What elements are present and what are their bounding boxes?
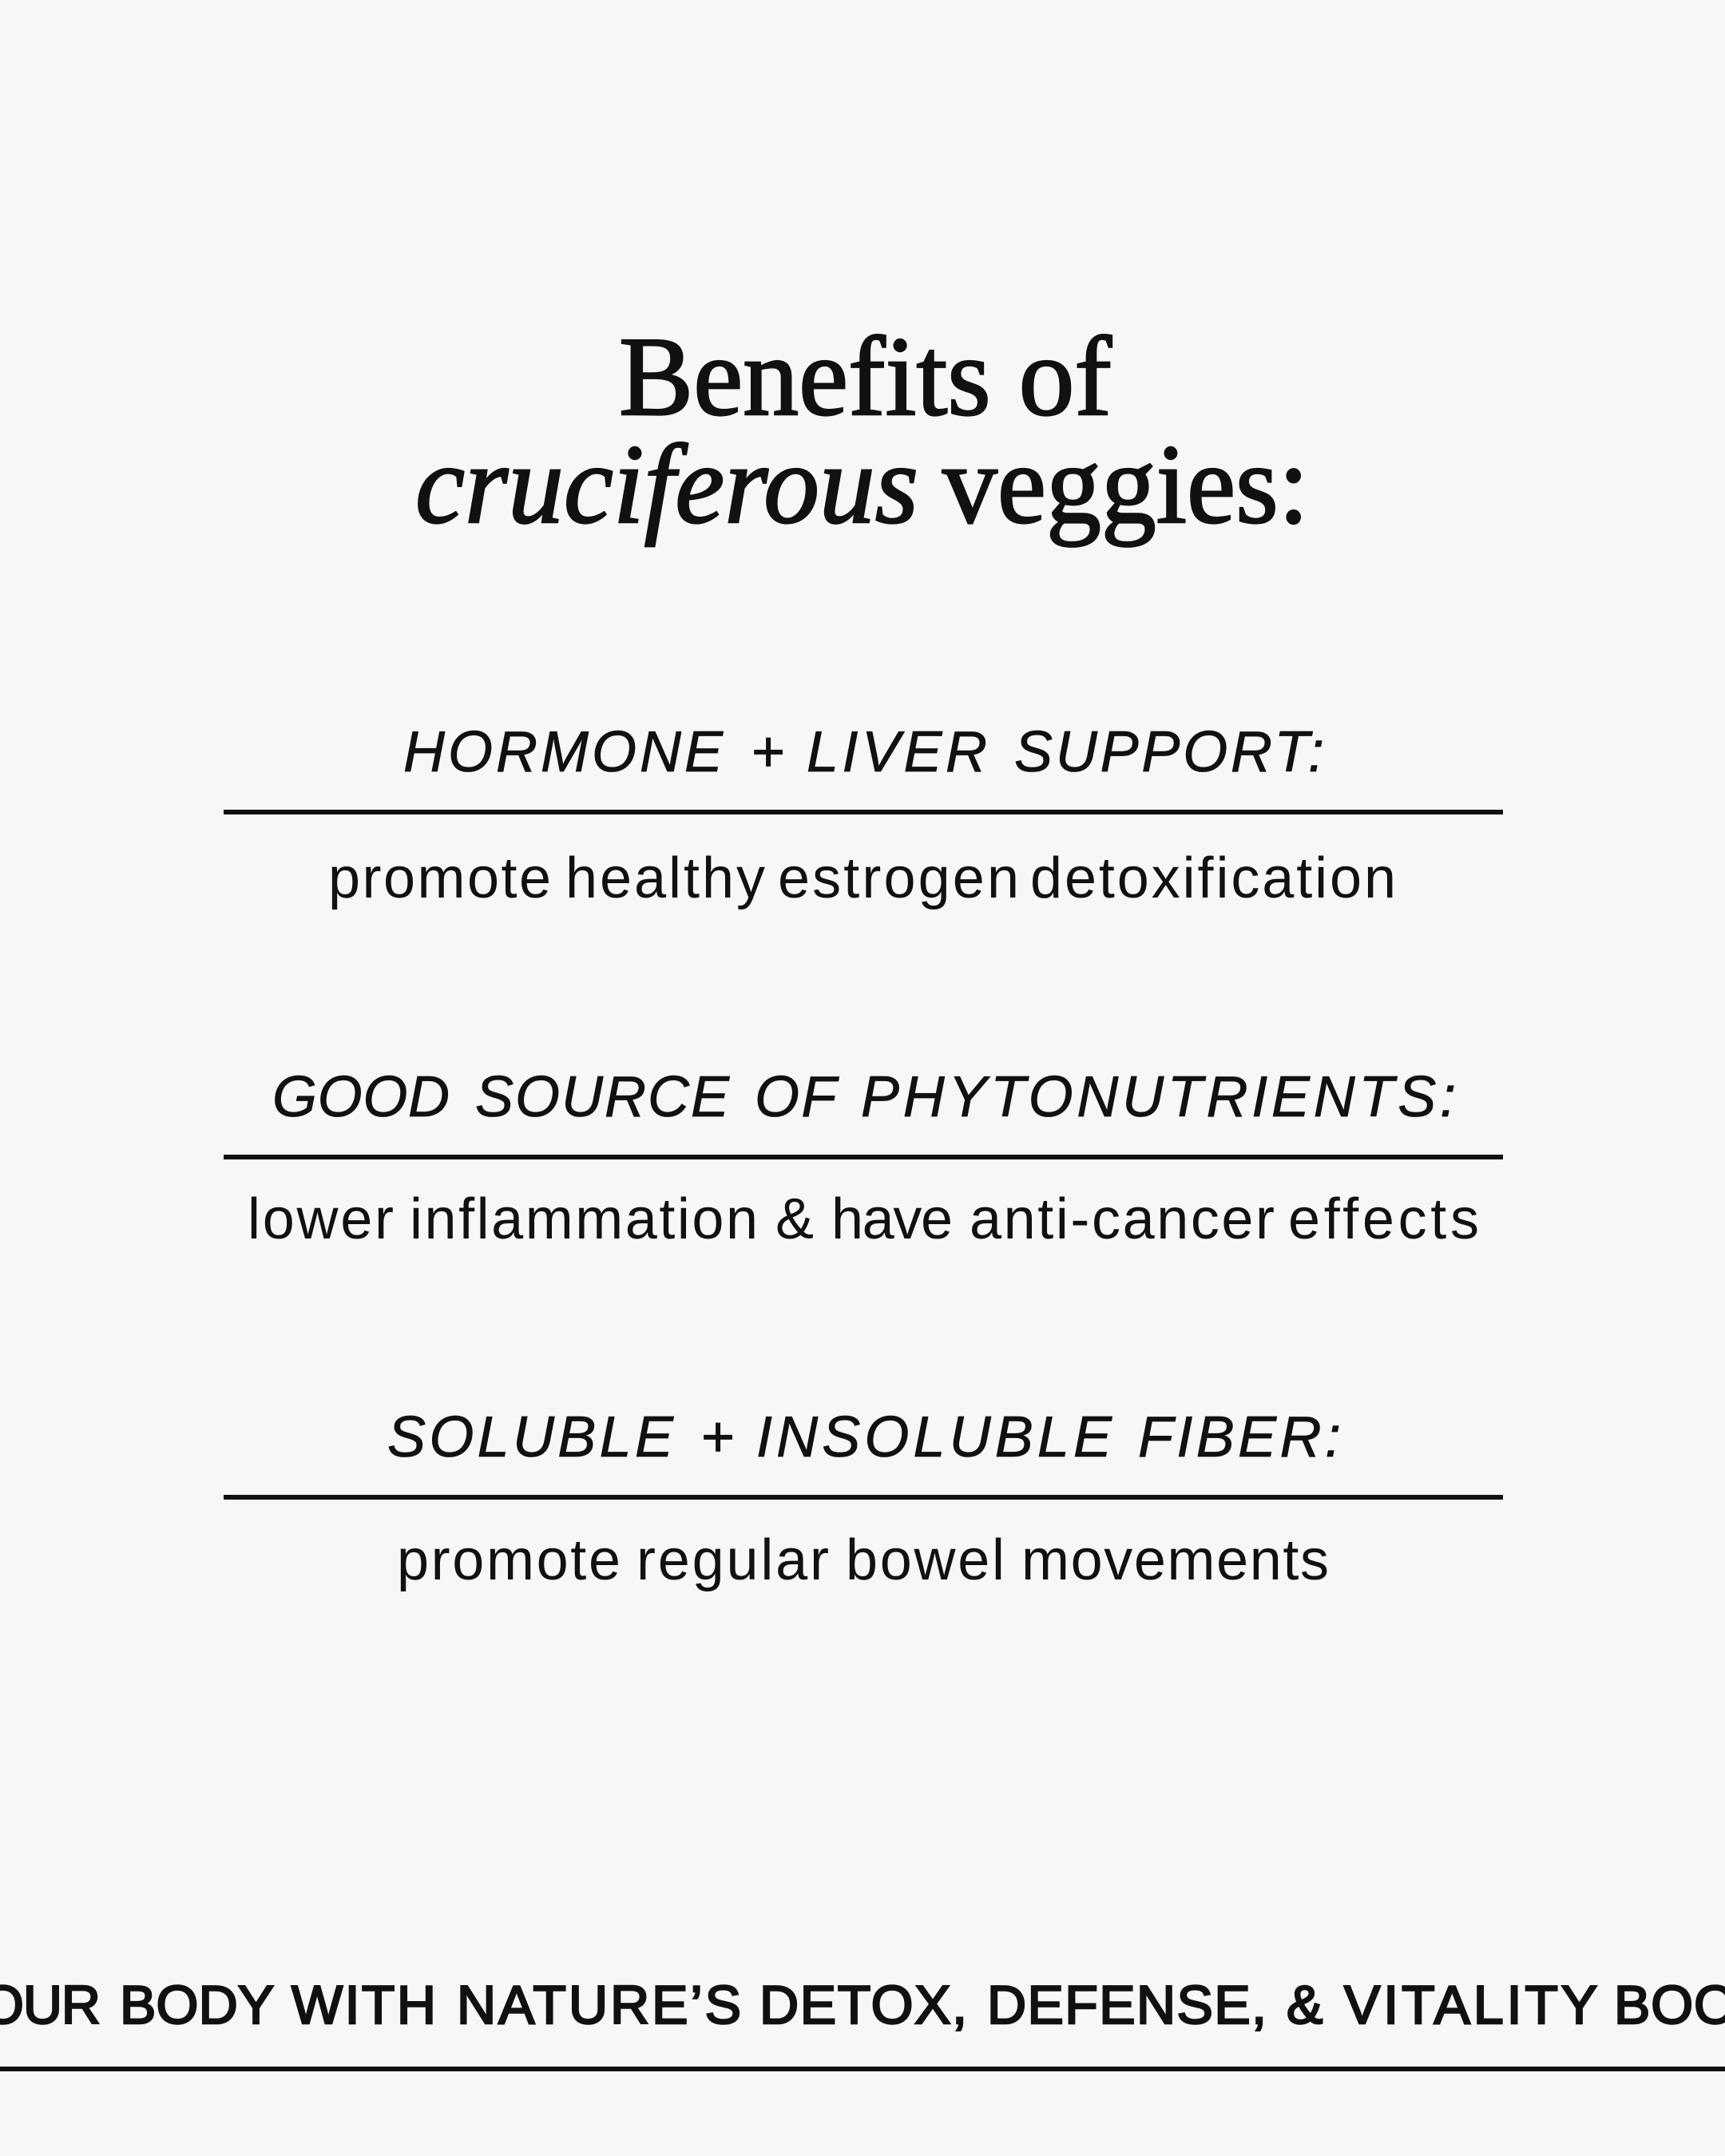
body text: bowel movements: bowel (846, 1528, 1005, 1592)
footer ticker text: BODY (120, 1975, 273, 2035)
body text: estrogen detoxification: promote (328, 846, 551, 910)
title: Benefits of (619, 313, 1112, 439)
divider line 2 (224, 1155, 1503, 1159)
heading: phytonutrients: SOURCE (475, 1065, 730, 1129)
divider line 3 (224, 1495, 1503, 1500)
heading: phytonutrients: GOOD (272, 1065, 450, 1129)
panel: fiber (224, 1405, 1503, 1592)
footer ticker text: DETOX, (759, 1975, 967, 2035)
footer rule (0, 2067, 1725, 2071)
panel: phytonutrients (224, 1065, 1503, 1251)
body text: estrogen detoxification: estrogen (778, 846, 1019, 910)
body text: inflammation: anti-cancer (970, 1187, 1275, 1251)
heading: hormone and liver support: + (751, 720, 784, 784)
panel: hormone and liver support (224, 720, 1503, 910)
footer ticker text: WITH (291, 1975, 436, 2035)
heading: phytonutrients: PHYTONUTRIENTS: (861, 1065, 1456, 1129)
heading: fiber: SOLUBLE (387, 1405, 674, 1469)
heading: fiber: INSOLUBLE (756, 1405, 1112, 1469)
title: veggies: (942, 421, 1309, 547)
title (415, 313, 1309, 547)
body text: bowel movements: regular (636, 1528, 829, 1592)
body text: bowel movements: movements (1021, 1528, 1329, 1592)
body text: bowel movements: promote (397, 1528, 621, 1592)
divider line 1 (224, 810, 1503, 814)
body text: inflammation: & (775, 1187, 814, 1251)
footer ticker text: VITALITY (1344, 1975, 1596, 2035)
body text: estrogen detoxification: healthy (565, 846, 765, 910)
heading: fiber: + (700, 1405, 734, 1469)
heading: hormone and liver support: HORMONE (403, 720, 724, 784)
footer ticker text: NATURE’S (457, 1975, 741, 2035)
heading: fiber: FIBER: (1138, 1405, 1341, 1469)
heading: hormone and liver support: LIVER (807, 720, 987, 784)
heading: phytonutrients: OF (755, 1065, 839, 1129)
footer ticker text: & (1287, 1975, 1322, 2035)
title: cruciferous (415, 421, 918, 547)
body text: inflammation: inflammation (410, 1187, 758, 1251)
heading: hormone and liver support: SUPPORT: (1014, 720, 1324, 784)
body text: estrogen detoxification: detoxification (1030, 846, 1396, 910)
body text: inflammation: have (831, 1187, 953, 1251)
footer ticker text: DEFENSE, (987, 1975, 1267, 2035)
body text: inflammation: lower (248, 1187, 394, 1251)
body text: inflammation: effects (1288, 1187, 1479, 1251)
